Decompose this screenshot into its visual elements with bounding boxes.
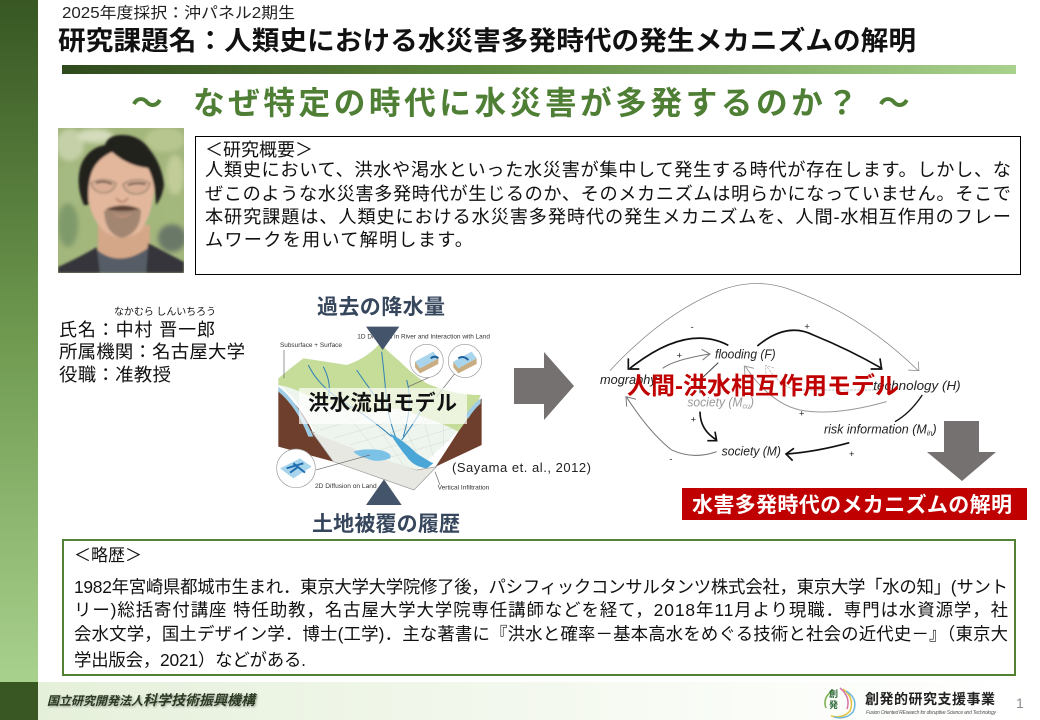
grid lines bbox=[320, 400, 457, 467]
hair bbox=[79, 135, 164, 205]
affiliation: 所属機関：名古屋大学 bbox=[59, 341, 245, 362]
variable labels: society (M) bbox=[722, 444, 781, 458]
title rule bbox=[62, 65, 1016, 74]
variable labels: ) bbox=[748, 396, 754, 410]
footer logo: 発 bbox=[829, 699, 838, 710]
label: land cover history: 土地被覆の履歴 bbox=[312, 513, 460, 536]
variable labels: cu bbox=[743, 402, 750, 411]
signs: + bbox=[804, 321, 810, 331]
variable labels: risk information (M bbox=[824, 422, 928, 436]
biography text: 学出版会，2021）などがある. bbox=[74, 650, 306, 670]
footer logo bbox=[825, 688, 996, 718]
panel: research overview bbox=[196, 136, 1020, 274]
biography text: リー)総括寄付講座 特任助教，名古屋大学大学院専任講師などを経て，2018年11月より現職．専門は水資源学，社 bbox=[74, 600, 1008, 620]
signs: - bbox=[669, 454, 672, 464]
model name label: 洪水流出モデル bbox=[308, 391, 457, 415]
terrain illustration: 2D Diffusion on Land bbox=[315, 484, 377, 490]
result banner bbox=[682, 488, 1027, 520]
signs: + bbox=[677, 350, 682, 360]
terrain illustration bbox=[277, 327, 490, 505]
signs: + bbox=[691, 414, 696, 424]
logo name: 創発的研究支援事業 bbox=[865, 691, 995, 707]
name: 氏名：中村 晋一郎 bbox=[59, 320, 215, 340]
subtitle question: ～ bbox=[878, 85, 910, 121]
overview text: ムワークを用いて解明します。 bbox=[205, 230, 473, 250]
footer organization name: 国立研究開発法人 bbox=[48, 695, 144, 709]
footer band bbox=[0, 682, 1040, 720]
variable labels: ) bbox=[930, 422, 937, 436]
jacket and shirt bbox=[58, 247, 100, 273]
page number: 1 bbox=[1016, 695, 1024, 711]
interaction model title: 人間-洪水相互作用モデル bbox=[627, 372, 899, 400]
signs bbox=[669, 321, 854, 464]
terrain illustration: Subsurface + Surface bbox=[280, 343, 343, 349]
variable labels: flooding (F) bbox=[715, 348, 776, 362]
biography heading: ＜略歴＞ bbox=[74, 546, 142, 565]
result banner: 水害多発時代のメカニズムの解明 bbox=[692, 493, 1012, 517]
left green sidebar bbox=[0, 0, 38, 682]
feedback loops bbox=[610, 284, 922, 461]
biography text: 会水文学，国土デザイン学．博士(工学)．主な著書に『洪水と確率－基本高水をめぐる技術と社会の近代史－』（東京大 bbox=[74, 624, 1008, 644]
flood runoff model diagram bbox=[277, 296, 591, 536]
footer organization name: 科学技術振興機構 bbox=[143, 692, 257, 708]
project title: 研究課題名：人類史における水災害多発時代の発生メカニズムの解明 bbox=[58, 26, 916, 56]
terrain illustration: Vertical Infiltration bbox=[438, 486, 489, 492]
overview heading: ＜研究概要＞ bbox=[205, 140, 313, 160]
footer organization name: 科学技術振興機構 bbox=[144, 693, 258, 709]
human-flood interaction diagram bbox=[600, 284, 961, 464]
signs: + bbox=[849, 449, 854, 459]
position: 役職：准教授 bbox=[59, 364, 171, 385]
model name label bbox=[299, 388, 467, 424]
citation: (Sayama et. al., 2012) bbox=[452, 460, 591, 475]
footer organization name: 国立研究開発法人 bbox=[47, 694, 143, 708]
neck bbox=[96, 224, 152, 260]
label: past rainfall: 過去の降水量 bbox=[317, 296, 445, 319]
researcher photo bbox=[56, 128, 186, 273]
overview text: ぜこのような水災害多発時代が生じるのか、そのメカニズムは明らかになっていません。そこで bbox=[205, 184, 1011, 204]
nose and mouth bbox=[116, 198, 128, 202]
subtitle question: ～ bbox=[131, 85, 163, 121]
panel: biography bbox=[63, 540, 1015, 675]
adoption label: 2025年度採択：沖パネル2期生 bbox=[62, 4, 295, 22]
researcher info bbox=[59, 306, 245, 385]
biography text bbox=[74, 577, 1008, 670]
variable labels: society (M bbox=[687, 396, 745, 410]
variable labels: mography bbox=[600, 373, 657, 387]
signs: - bbox=[691, 322, 694, 332]
logo emblem bbox=[825, 688, 855, 718]
overview text: 本研究課題は、人類史における水災害多発時代の発生メカニズムを、人間-水相互作用のフレー bbox=[205, 207, 1011, 227]
signs: + bbox=[799, 409, 804, 419]
face bbox=[87, 148, 155, 237]
variable labels bbox=[600, 348, 961, 458]
overview text: 人類史において、洪水や渇水といった水災害が集中して発生する時代が存在します。しかし、な bbox=[205, 160, 1011, 180]
arrow: model to result bbox=[927, 421, 996, 481]
logo tagline: Fusion Oriented REsearch for disruptive Science and Technology bbox=[866, 710, 996, 716]
footer organization name bbox=[47, 692, 258, 709]
variable labels: technology (H) bbox=[873, 379, 961, 393]
footer logo: 創 bbox=[829, 688, 838, 699]
arrow: model to interaction bbox=[514, 352, 574, 420]
variable labels: in bbox=[927, 428, 932, 437]
overview text bbox=[205, 160, 1011, 250]
name ruby: なかむら しんいちろう bbox=[114, 306, 216, 318]
glasses bbox=[91, 180, 150, 194]
subtitle question: なぜ特定の時代に水災害が多発するのか？ bbox=[193, 85, 858, 121]
biography text: 1982年宮崎県都城市生まれ．東京大学大学院修了後，パシフィックコンサルタンツ株式会社，東京大学「水の知」(サント bbox=[74, 577, 1008, 597]
terrain illustration: 1D Diffusion in River and Interaction with Land bbox=[357, 334, 490, 340]
